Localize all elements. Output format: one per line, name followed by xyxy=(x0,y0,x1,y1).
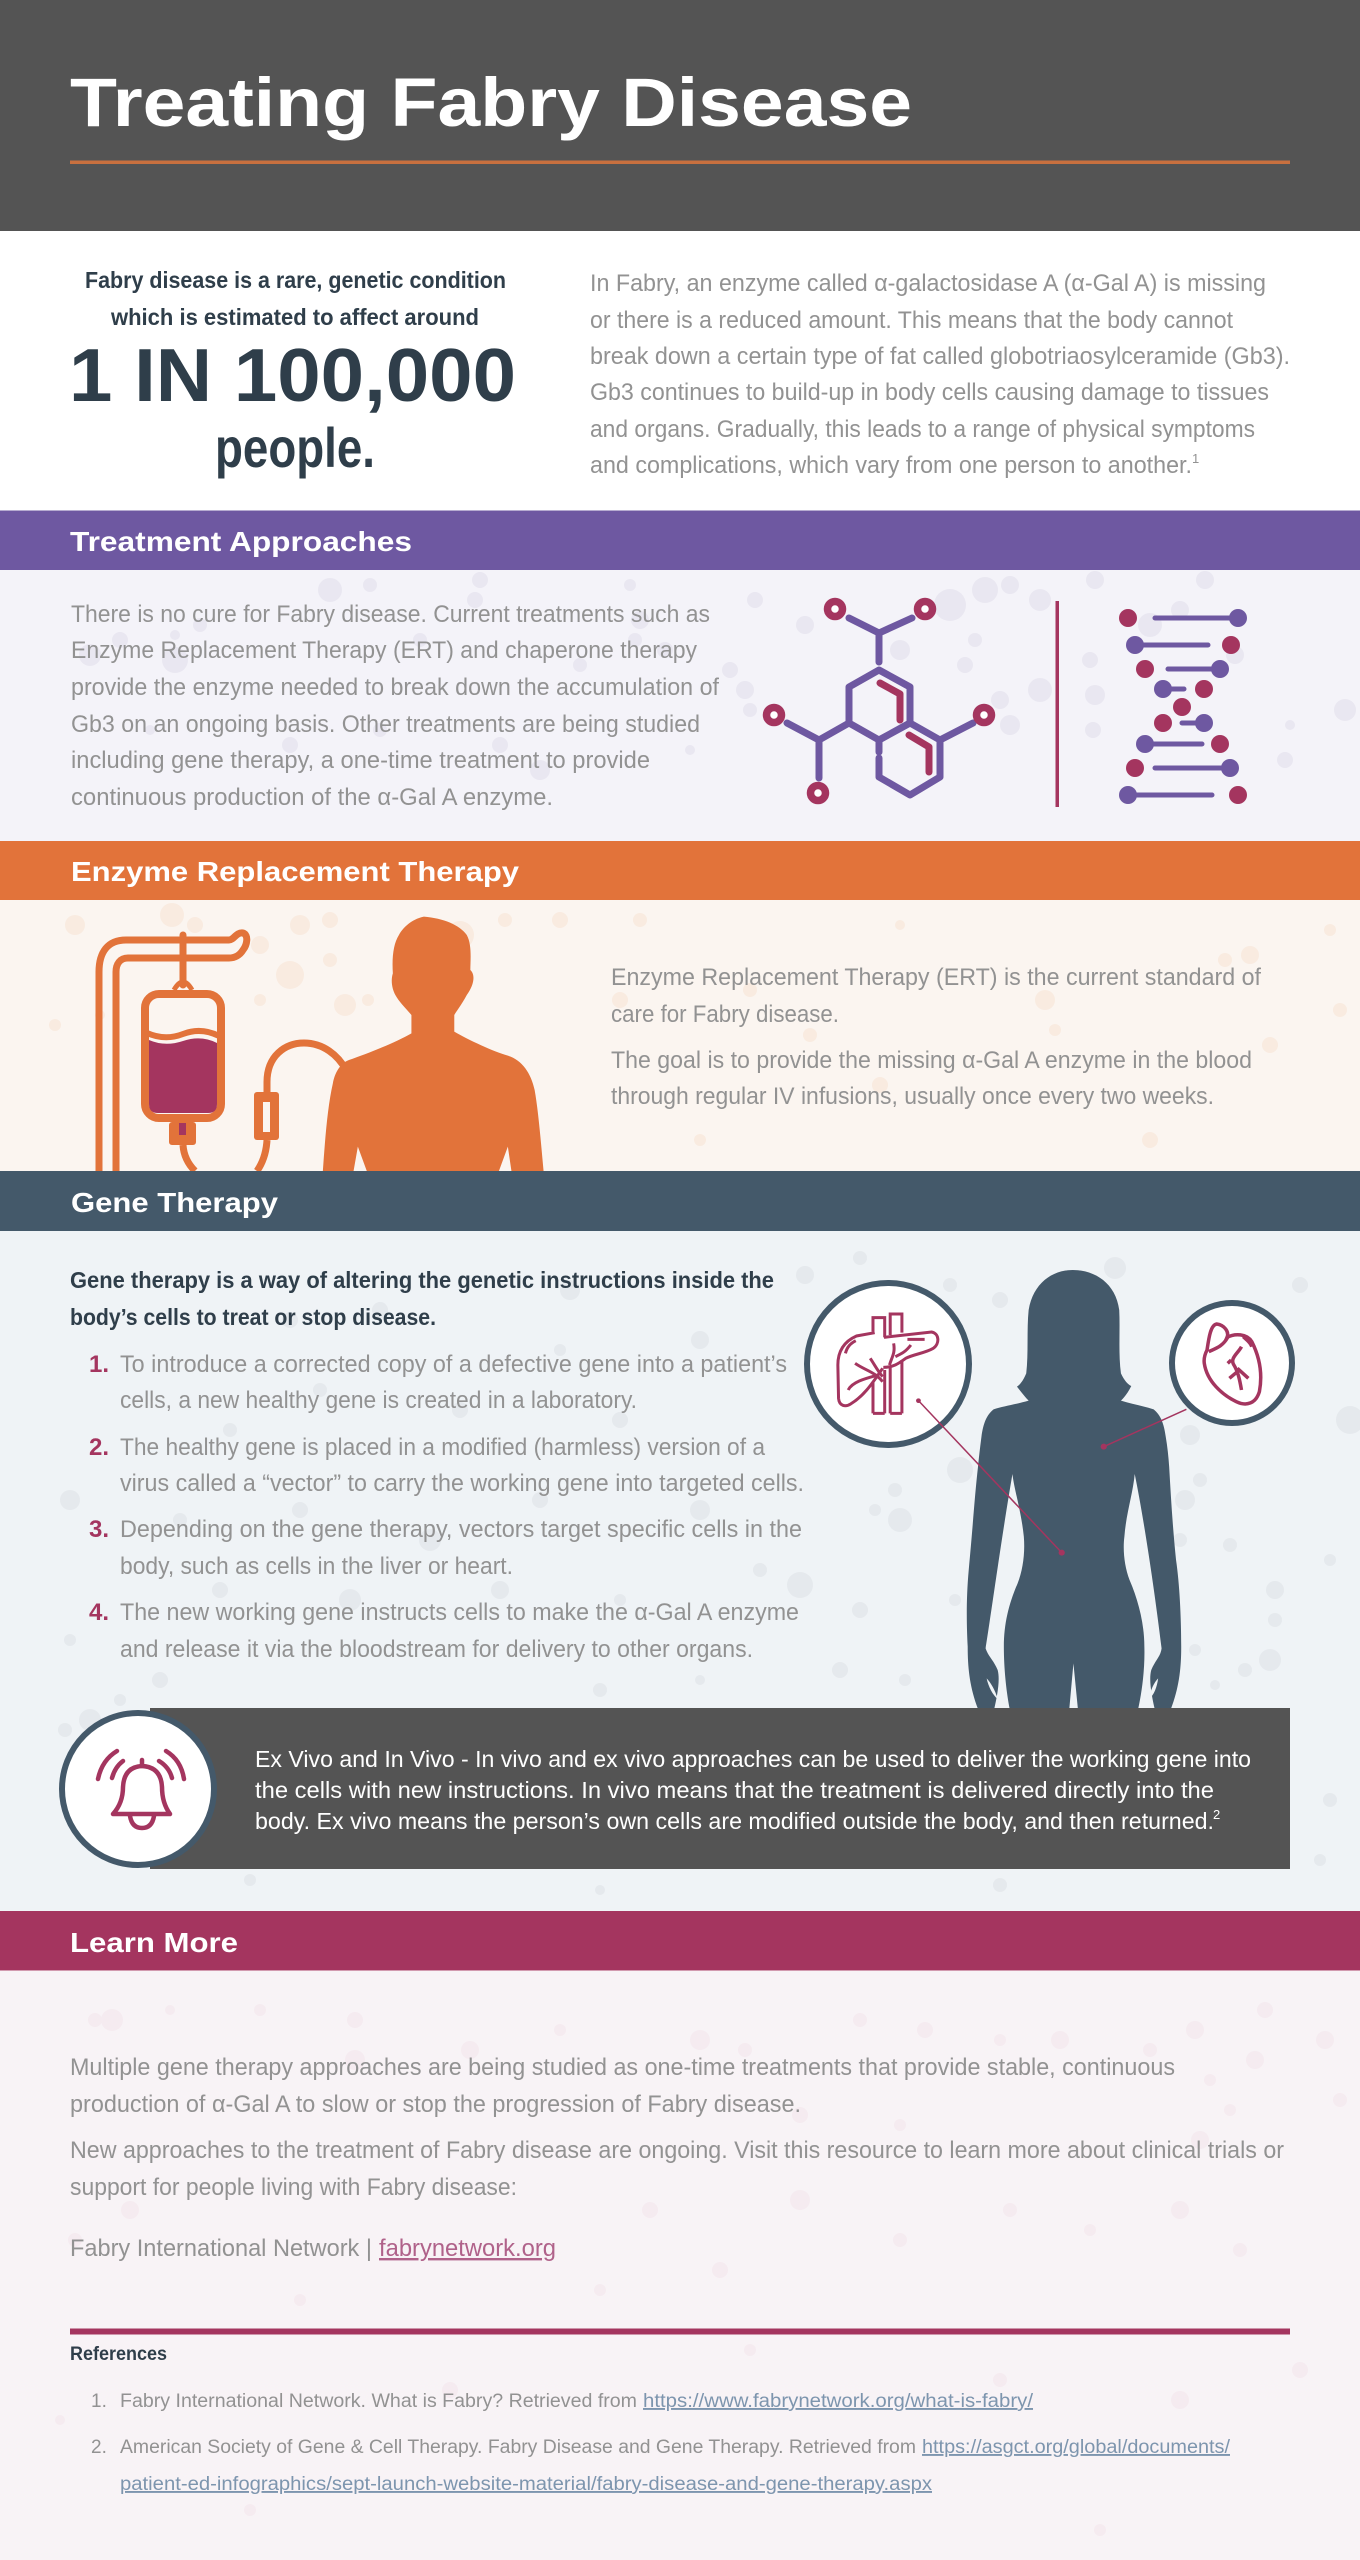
icon: woman silhouette xyxy=(967,1270,1181,1709)
statistic lead-in text: Fabry disease is a rare, genetic condition xyxy=(85,267,506,293)
text block: gene therapy definition: body’s cells to treat or stop disease. xyxy=(70,1304,436,1330)
icon: IV drip stand and bag xyxy=(99,933,346,1171)
text block: what Fabry disease is: and complications, which vary from one person to another. xyxy=(590,452,1192,479)
section background xyxy=(0,900,1360,1171)
section band xyxy=(0,1171,1360,1231)
numbered list: steps: 2. xyxy=(89,1434,109,1461)
text block: no cure: There is no cure for Fabry disease. Current treatments such as xyxy=(71,601,710,628)
text block: what Fabry disease is: break down a certain type of fat called globotriaosylceramide (Gb3). xyxy=(590,343,1290,370)
text block: gene therapy definition xyxy=(70,1267,774,1330)
text block: approaches being studied: support for people living with Fabry disease: xyxy=(70,2174,517,2201)
references: patient-ed-infographics/sept-launch-website-material/fabry-disease-and-gene-therapy.aspx xyxy=(120,2474,933,2495)
resource link: Fabry International Network | xyxy=(70,2235,372,2262)
section background xyxy=(0,1971,1360,2560)
callout text: 2 xyxy=(1213,1807,1220,1822)
text block: no cure: Enzyme Replacement Therapy (ERT) and chaperone therapy xyxy=(71,637,697,664)
icon: heart callout xyxy=(916,1303,1292,1556)
text block: what Fabry disease is: 1 xyxy=(1192,451,1199,466)
icon: bell xyxy=(62,1713,214,1865)
callout text: Ex Vivo and In Vivo - In vivo and ex vivo approaches can be used to deliver the working gene into xyxy=(255,1746,1251,1772)
numbered list: steps: virus called a “vector” to carry the working gene into targeted cells. xyxy=(120,1470,804,1497)
text block: what Fabry disease is: and organs. Gradually, this leads to a range of physical symptoms xyxy=(590,416,1255,443)
resource link: fabrynetwork.org xyxy=(379,2235,556,2262)
statistic lead-in text: which is estimated to affect around xyxy=(110,304,479,330)
icon: DNA helix xyxy=(1119,609,1247,804)
statistic lead-in text xyxy=(85,267,506,330)
text block: ERT description: The goal is to provide the missing α-Gal A enzyme in the blood xyxy=(611,1047,1252,1074)
text block: what Fabry disease is xyxy=(590,270,1290,479)
text block: approaches being studied: production of α-Gal A to slow or stop the progression of Fabry disease. xyxy=(70,2091,801,2118)
section heading: Learn More xyxy=(70,1927,238,1958)
text block: ERT description: through regular IV infusions, usually once every two weeks. xyxy=(611,1083,1214,1110)
references: https://www.fabrynetwork.org/what-is-fabry/ xyxy=(643,2391,1034,2412)
numbered list: steps: Depending on the gene therapy, vectors target specific cells in the xyxy=(120,1516,802,1543)
numbered list: steps: 4. xyxy=(89,1599,109,1626)
section background xyxy=(0,1231,1360,1911)
text block: what Fabry disease is: or there is a reduced amount. This means that the body cannot xyxy=(590,307,1233,334)
text block: ERT description: care for Fabry disease. xyxy=(611,1001,839,1028)
icon: patient silhouette xyxy=(323,917,544,1171)
text block: no cure: including gene therapy, a one-time treatment to provide xyxy=(71,747,650,774)
numbered list: steps: 1. xyxy=(89,1351,109,1378)
text block: ERT description: Enzyme Replacement Therapy (ERT) is the current standard of xyxy=(611,964,1261,991)
numbered list: steps: and release it via the bloodstream for delivery to other organs. xyxy=(120,1636,753,1663)
icon: molecule xyxy=(766,602,992,800)
panel: treatment approaches xyxy=(0,510,1360,841)
text block: gene therapy definition: Gene therapy is a way of altering the genetic instructions inside the xyxy=(70,1267,774,1293)
numbered list: steps: body, such as cells in the liver or heart. xyxy=(120,1553,513,1580)
text block: approaches being studied xyxy=(70,2054,1284,2201)
text block: what Fabry disease is: Gb3 continues to build-up in body cells causing damage to tissues xyxy=(590,379,1269,406)
text block: approaches being studied: New approaches to the treatment of Fabry disease are ongoing. Visit this resource to learn more about clinical trials or xyxy=(70,2137,1284,2164)
numbered list: steps: To introduce a corrected copy of a defective gene into a patient’s xyxy=(120,1351,787,1378)
panel: prevalence statistic xyxy=(69,267,516,479)
icon: liver callout xyxy=(807,1283,969,1445)
callout text: body. Ex vivo means the person’s own cells are modified outside the body, and then returned. xyxy=(255,1808,1214,1834)
text block: what Fabry disease is: In Fabry, an enzyme called α-galactosidase A (α-Gal A) is missing xyxy=(590,270,1266,297)
references: https://asgct.org/global/documents/ xyxy=(922,2437,1231,2458)
references xyxy=(70,2344,1231,2495)
numbered list: steps: The new working gene instructs cells to make the α-Gal A enzyme xyxy=(120,1599,799,1626)
references: 1. xyxy=(91,2391,107,2412)
section heading: Enzyme Replacement Therapy xyxy=(71,856,519,887)
numbered list: steps: 3. xyxy=(89,1516,109,1543)
text block: no cure: continuous production of the α-Gal A enzyme. xyxy=(71,784,553,811)
big number unit: people. xyxy=(215,416,375,479)
numbered list: steps: The healthy gene is placed in a modified (harmless) version of a xyxy=(120,1434,766,1461)
numbered list: steps xyxy=(89,1351,804,1663)
references: References xyxy=(70,2344,167,2365)
references: 2. xyxy=(91,2437,107,2458)
section background xyxy=(0,570,1360,841)
callout text xyxy=(255,1746,1251,1834)
section band xyxy=(0,510,1360,570)
panel: enzyme replacement therapy xyxy=(0,841,1360,1171)
references: American Society of Gene & Cell Therapy. Fabry Disease and Gene Therapy. Retrieved from xyxy=(120,2437,916,2458)
text block: approaches being studied: Multiple gene therapy approaches are being studied as one-time treatments that provide stable, continuous xyxy=(70,2054,1175,2081)
section band xyxy=(0,1911,1360,1970)
section heading: Treatment Approaches xyxy=(70,526,412,557)
section band xyxy=(0,841,1360,900)
panel: learn more xyxy=(0,1911,1360,2560)
text block: ERT description xyxy=(611,964,1261,1110)
numbered list: steps: cells, a new healthy gene is created in a laboratory. xyxy=(120,1387,637,1414)
references: Fabry International Network. What is Fabry? Retrieved from xyxy=(120,2391,637,2412)
title: Treating Fabry Disease xyxy=(70,64,912,141)
callout text: the cells with new instructions. In vivo means that the treatment is delivered directly into the xyxy=(255,1777,1214,1803)
connector lines to organs xyxy=(916,1398,1186,1556)
text block: no cure xyxy=(71,601,719,811)
panel: gene therapy xyxy=(0,1171,1360,1911)
section heading: Gene Therapy xyxy=(71,1187,278,1218)
resource link xyxy=(70,2235,556,2262)
text block: no cure: provide the enzyme needed to break down the accumulation of xyxy=(71,674,719,701)
callout: ex vivo and in vivo xyxy=(62,1708,1290,1869)
header panel xyxy=(0,0,1360,231)
text block: no cure: Gb3 on an ongoing basis. Other treatments are being studied xyxy=(71,711,700,738)
big number: 1 IN 100,000 xyxy=(69,333,516,417)
